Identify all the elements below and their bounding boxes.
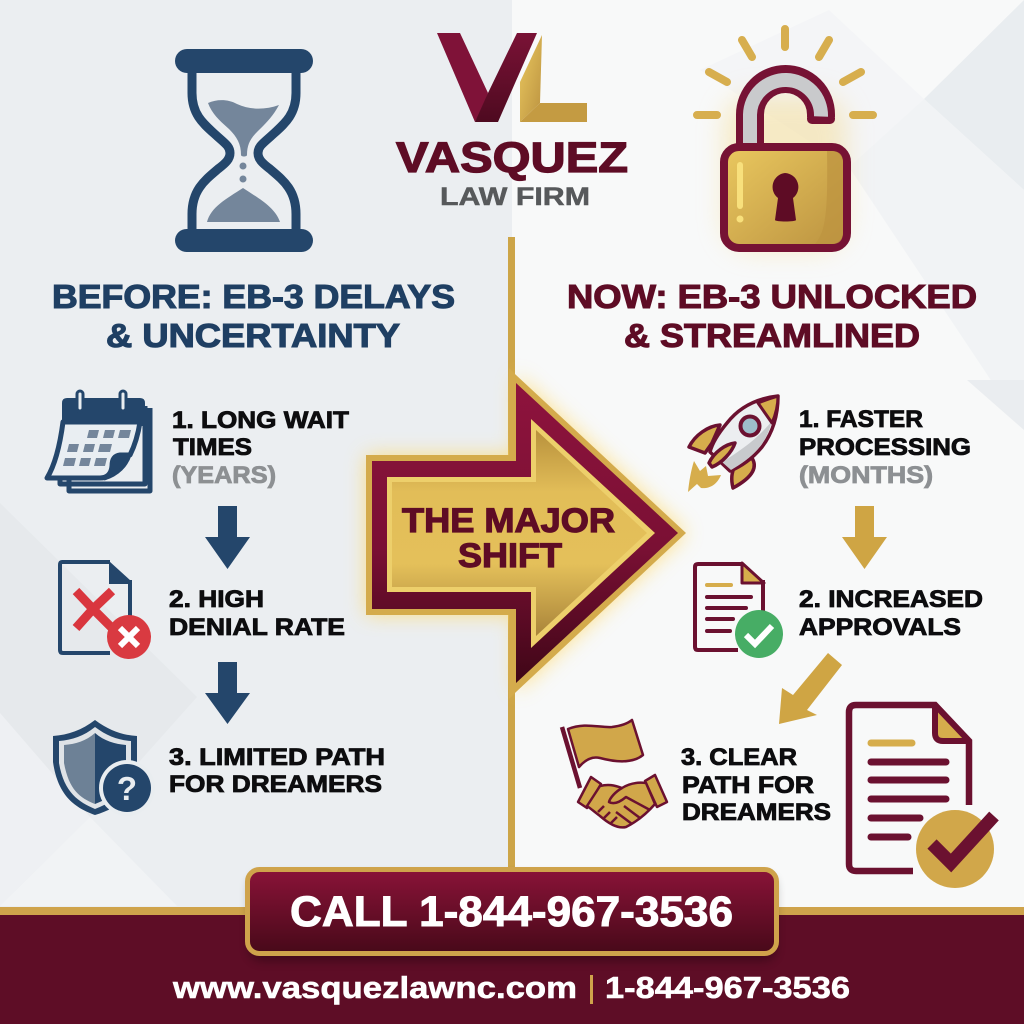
arrow: the major shift: [366, 368, 686, 699]
label: long wait times: TIMES: [173, 434, 252, 461]
call to action button: [248, 870, 776, 961]
center divider line: [508, 237, 515, 877]
label: limited path: 3. LIMITED PATH: [169, 744, 385, 771]
label: high denial rate: 2. HIGH: [169, 586, 264, 613]
arrow: before step 2 to 3: [205, 662, 250, 724]
heading: now: NOW: EB-3 UNLOCKED: [567, 278, 977, 315]
label: increased approvals: [799, 586, 983, 641]
label: increased approvals: 2. INCREASED: [799, 586, 983, 613]
label: limited path: [169, 744, 385, 798]
label: increased approvals: APPROVALS: [799, 614, 961, 641]
heading: now: [567, 278, 977, 354]
arrow: before step 1 to 2: [205, 506, 250, 569]
icon: rocket: [688, 396, 778, 492]
label: faster processing: 1. FASTER: [799, 406, 923, 433]
label: clear path: DREAMERS: [682, 799, 831, 826]
heading: before: [52, 278, 455, 354]
heading: before: BEFORE: EB-3 DELAYS: [52, 278, 455, 315]
label: high denial rate: DENIAL RATE: [169, 614, 345, 641]
icon: approved document: [695, 563, 783, 658]
footer contact line: www.vasquezlawnc.com: [172, 970, 577, 1005]
label: long wait times: (YEARS): [172, 462, 276, 489]
footer band: [0, 907, 1024, 1024]
icon: flag and handshake: [562, 720, 667, 827]
logo: Vasquez Law Firm: [396, 33, 628, 211]
call to action button: CALL 1-844-967-3536: [290, 888, 733, 936]
label: faster processing: [799, 406, 971, 489]
label: limited path: FOR DREAMERS: [169, 771, 382, 798]
label: faster processing: PROCESSING: [799, 434, 971, 461]
label: clear path: [681, 744, 831, 826]
arrow: now step 1 to 2: [842, 506, 887, 569]
footer contact line: [172, 970, 850, 1005]
icon: open padlock: [697, 29, 873, 250]
heading: before: & UNCERTAINTY: [106, 317, 400, 354]
logo: Vasquez Law Firm: LAW FIRM: [440, 183, 590, 211]
icon: shield with question mark: ?: [117, 770, 137, 807]
arrow: diagonal to step 3: [779, 653, 842, 724]
label: long wait times: 1. LONG WAIT: [172, 407, 349, 434]
icon: hourglass: [175, 49, 313, 252]
arrow: the major shift: THE MAJOR: [402, 502, 615, 540]
label: high denial rate: [169, 586, 345, 641]
heading: now: & STREAMLINED: [624, 317, 920, 354]
label: long wait times: [172, 407, 349, 489]
logo: Vasquez Law Firm: VASQUEZ: [396, 134, 628, 182]
label: clear path: PATH FOR: [682, 772, 814, 799]
icon: large approved document: [849, 705, 997, 891]
icon: calendar: [47, 394, 150, 491]
arrow: the major shift: SHIFT: [458, 537, 562, 575]
icon: shield with question mark: [53, 720, 155, 816]
label: clear path: 3. CLEAR: [681, 744, 797, 771]
icon: denied document: [60, 561, 151, 659]
footer contact line: 1-844-967-3536: [605, 970, 850, 1005]
label: faster processing: (MONTHS): [799, 462, 933, 489]
